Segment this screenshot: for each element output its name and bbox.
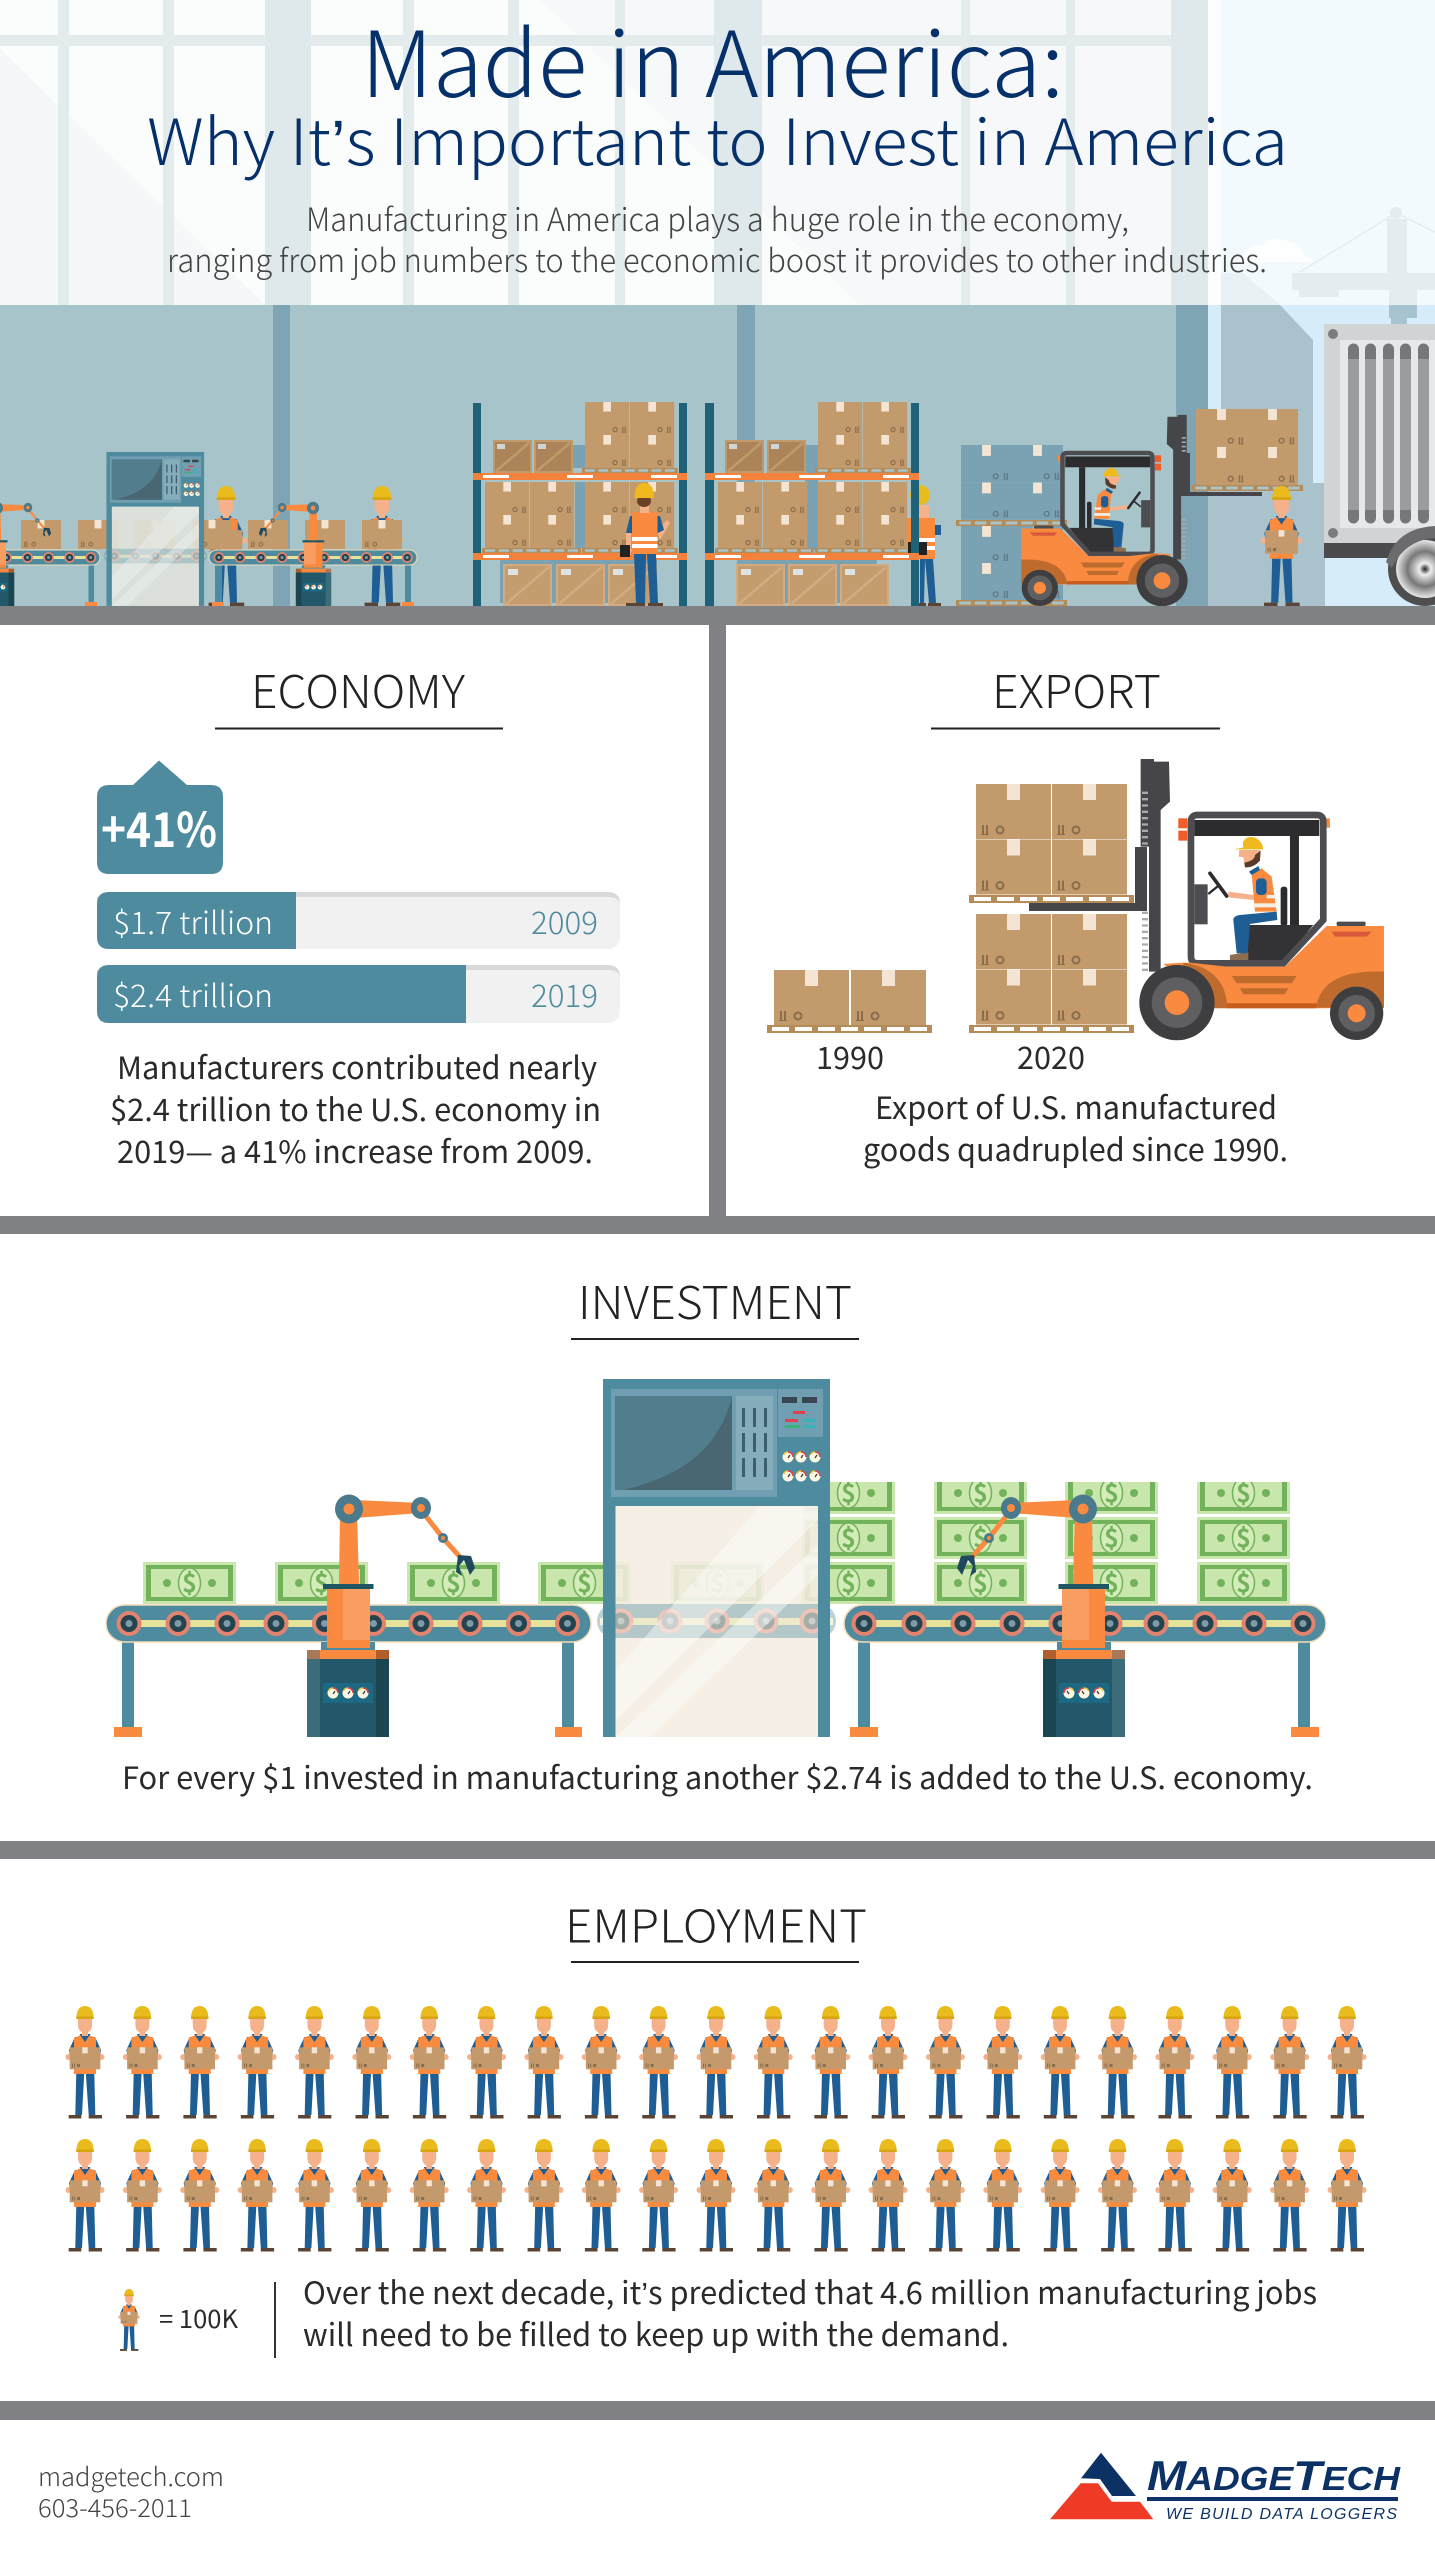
intro text: ranging from job numbers to the economic boost it provides to other industries. [167,236,1267,282]
conveyor lines with boxes [0,520,417,606]
economy caption: $2.4 trillion to the U.S. economy in [110,1085,601,1130]
crane and cloud [1240,207,1435,324]
economy caption [110,1043,601,1172]
footer contact: 603-456-2011 [38,2489,192,2525]
pallet 1990 [767,970,932,1033]
pallet stack 2020 and forklift [969,759,1384,1040]
blue crates behind shelves [500,445,877,603]
workers at conveyor [205,486,403,606]
legend: one worker equals 100K [118,2289,239,2351]
section dividers [0,625,1435,2420]
legend: one worker equals 100K: = 100K [159,2300,239,2336]
right conveyor [844,1605,1326,1737]
blue pallet stacks [956,445,1067,606]
worker row 2 [66,2139,1366,2252]
heading: employment: EMPLOYMENT [565,1890,867,1956]
bar: 2009 [97,892,620,949]
panel: investment [106,1267,1326,1798]
badge: +41% [97,760,223,874]
heading: export: EXPORT [992,656,1161,721]
logo mark [1050,2453,1153,2519]
shelf posts and beams [473,403,919,606]
robot arms in hero [0,502,331,606]
badge: +41%: +41% [101,791,217,861]
truck [1324,324,1435,606]
bar: 2019 [97,965,620,1023]
bar: 2019: $2.4 trillion [113,971,273,1016]
floor [0,606,1435,625]
intro text [167,195,1267,282]
legend separator [274,2282,276,2358]
heading: economy: ECONOMY [251,656,465,721]
employment caption: will need to be filled to keep up with the demand. [303,2310,1009,2355]
money bills [143,1472,1290,1604]
panel: employment [66,1890,1366,2358]
intro text: Manufacturing in America plays a huge role in the economy, [306,195,1129,241]
worker row 1 [66,2006,1366,2118]
footer contact: madgetech.com [38,2458,224,2494]
investment caption: For every $1 invested in manufacturing another $2.74 is added to the U.S. economy. [122,1753,1313,1798]
employment caption: Over the next decade, it’s predicted that 4.6 million manufacturing jobs [303,2268,1317,2313]
footer contact [38,2458,224,2525]
year labels: 2020 [1017,1033,1085,1078]
forklift carrying pallet [1021,409,1303,606]
panel: economy [97,656,620,1172]
heading: investment: INVESTMENT [578,1267,852,1332]
year labels: 1990 [816,1033,884,1078]
bar: 2019: 2019 [531,971,598,1016]
worker back view at shelf [620,483,670,606]
economy caption: Manufacturers contributed nearly [117,1043,597,1088]
left conveyor [106,1605,591,1737]
export caption [863,1083,1288,1170]
worker with box by truck [1261,486,1302,606]
logo tagline: WE BUILD DATA LOGGERS [1166,2506,1397,2523]
machine in hero [104,452,207,606]
central machine [597,1379,836,1737]
warehouse shelves with boxes [482,402,911,606]
bar: 2009: 2009 [531,898,598,943]
worker side view at shelf [907,485,941,606]
panel: hero factory scene [0,0,1435,625]
year labels [816,1033,1085,1078]
window backdrop [0,0,1435,606]
subtitle: Why It’s Important to Invest in America [147,92,1288,184]
export caption: Export of U.S. manufactured [875,1083,1277,1128]
logo: MadgeTech [1050,2452,1401,2523]
robot arms [307,1494,1125,1737]
economy caption: 2019— a 41% increase from 2009. [117,1127,593,1172]
panel: export [767,656,1384,1170]
bar: 2009: $1.7 trillion [113,898,273,943]
employment caption [303,2268,1317,2355]
logo wordmark: MADGE TECH [1147,2452,1401,2499]
factory wall [0,305,1325,606]
export caption: goods quadrupled since 1990. [863,1125,1288,1170]
